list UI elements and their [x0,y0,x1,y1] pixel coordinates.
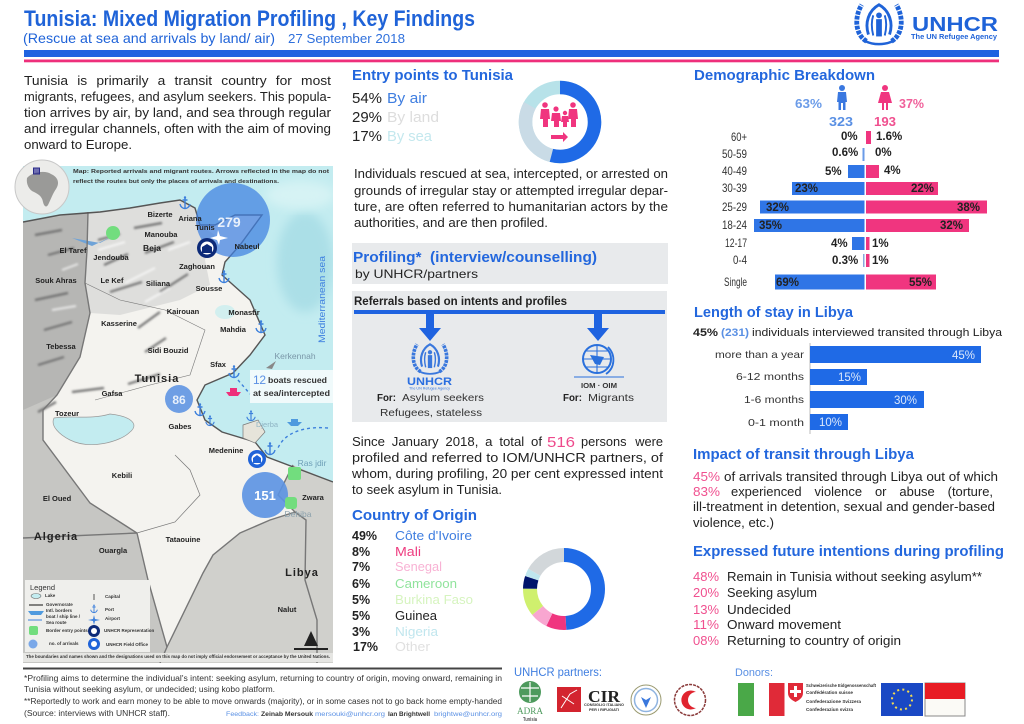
map place labels: Gafsa [102,389,123,398]
map place labels: Tebessa [46,342,77,351]
text: total profiled: whom, during profiling, 20 per cent expressed intent [351,467,664,481]
icon: female [878,85,892,110]
text: total profiled: 516 [547,434,575,451]
panel: referrals [352,291,667,422]
locator globe [15,160,69,214]
logo: CIR [557,687,624,712]
legend: Lake [45,593,56,598]
intentions list: 48% [693,569,719,584]
map place labels: Algeria [34,531,78,543]
footnotes: *Profiling aims to determine the individual's intent: seeking asylum, returning to country of origin, moving onward, remaining in [24,674,502,683]
legend: Governorate [46,602,73,607]
age labels: 60+ [731,130,747,144]
gender totals [795,96,924,129]
bar values: 1% [872,238,889,250]
map place labels: Ras jdir [298,458,327,468]
icon: UNHCR logo [857,5,999,44]
map place labels: Tataouine [166,535,200,544]
logo: UNHCR: The UN Refugee Agency [409,386,450,390]
legend: Capital [105,594,120,599]
map place labels: Le Kef [101,276,124,285]
arrow: to UNHCR [419,314,441,341]
text: total profiled: to seek asylum in Tunisia. [352,483,502,497]
text: UNHCR referral: For: [377,392,396,404]
heading: entry points: Entry points to Tunisia [352,67,514,84]
text: total profiled: Since January 2018, a total of [352,435,543,449]
text: UNHCR referral: Asylum seekers [402,392,484,404]
map disclaimer: The boundaries and names shown and the designations used on this map do not imply official endorsement or acceptance by the United Nations. [26,654,330,659]
partners [514,665,706,723]
male bars [754,148,864,290]
feedback contacts: Zeinab Mersouk [261,711,313,718]
entry point values [352,90,439,145]
legend: boat / ship line / [46,614,81,619]
footnotes: **Reportedly to work and earn money to be able to move onwards (majority), or in some cases not to go back home empty-handed [24,697,502,706]
intro text [24,73,332,152]
legend [25,580,155,652]
UNHCR representation office [197,238,217,258]
bar chart: stay duration: 45% [952,350,975,362]
summary line: individuals interviewed transited through Libya [752,327,1003,339]
entry point values: 29% [352,109,382,126]
intentions list: Onward movement [727,617,841,632]
bar chart: stay duration: 6-12 months [736,371,804,383]
bubble values: 151 [254,488,276,503]
intro text: and irregular channels, often with the aim of moving [24,121,331,136]
bar values: 32% [766,202,789,214]
bar values: 0.3% [832,255,858,267]
country list: 8% [352,545,370,559]
intentions list: Remain in Tunisia without seeking asylum** [727,569,982,584]
text: rescued at sea: authorities, and are then profiled. [354,216,548,230]
bar values [759,131,980,289]
map place labels: Dehiba [285,509,312,519]
legend: UNHCR Field Office [106,642,149,647]
country list: Other [395,639,431,654]
map place labels: Sousse [196,284,222,293]
text: IOM referral: For: [563,392,582,404]
map place labels [34,210,327,614]
legend: no. of arrivals [49,641,79,646]
map note: reflect the routes but only the places of arrivals and destinations. [73,179,280,185]
country list: 5% [352,609,370,623]
country list: Cameroon [395,576,457,591]
donut chart: entry points [525,87,595,156]
text: IOM referral: Migrants [588,392,634,404]
flag: Switzerland: Confederazione Svizzera [806,699,861,705]
logo: Red Crescent [674,684,706,716]
bar chart: stay duration: 15% [838,372,861,384]
map place labels: Libya [285,567,319,579]
bar values: 1.6% [876,131,902,143]
map place labels: Nalut [278,605,297,614]
title: 27 September 2018 [288,31,405,46]
gender totals: 193 [874,114,896,129]
bar values: 1% [872,255,889,267]
intentions list [693,569,982,648]
country list: Nigeria [395,624,439,639]
text: UNHCR referral [377,392,484,419]
panel: country of origin [352,507,598,654]
map place labels: Siliana [146,279,171,288]
logo: CIR: CIR [588,687,621,706]
impact text: 83% [693,485,720,499]
panel: demographic breakdown: Demographic Breakdown [694,67,875,84]
logo: IOM [574,345,624,390]
map place labels: Zaghouan [179,262,215,271]
map place labels: Jendouba [93,253,130,262]
entry point values: 54% [352,90,382,107]
panel: entry points [352,67,595,156]
entry point values: By air [387,90,427,107]
country list [352,528,473,654]
icon: UNHCR logo: The UN Refugee Agency [911,34,997,41]
age labels: 30-39 [722,181,747,195]
logo: ADRA [517,681,543,723]
panel: impact of transit: Impact of transit through Libya [693,446,915,463]
map disclaimer [23,653,333,662]
flag: Switzerland [788,683,876,713]
age labels: 12-17 [725,236,747,250]
map place labels: Zwara [302,493,325,502]
north arrow [294,631,328,650]
map place labels: Djerba [256,420,279,429]
callout: boats rescued [250,370,333,403]
footnotes [23,668,502,718]
country list: 5% [352,593,370,607]
intentions list: 20% [693,585,719,600]
text: rescued at sea [354,167,668,230]
gender totals: 323 [829,114,853,129]
age labels: 0-4 [733,253,747,267]
map place labels: Beja [143,243,161,253]
country list: Côte d'Ivoire [395,528,472,543]
bar values: 55% [909,277,932,289]
panel: country of origin: Country of Origin [352,507,477,524]
bar chart: stay duration: more than a year [715,349,805,361]
bar values: 0.6% [832,147,858,159]
flag: Italy [738,683,784,716]
map place labels: Kasserine [101,319,137,328]
logo: UNHCR [407,344,452,390]
map place labels: Mahdia [220,325,247,334]
age labels [722,130,747,289]
map place labels: Manouba [145,230,178,239]
female bars [866,131,987,290]
bar values: 22% [911,183,934,195]
panel: length of stay in Libya: Length of stay in Libya [694,304,854,321]
intro text: onward to Europe. [24,137,132,152]
flag: Switzerland: Confédération suisse [806,690,853,696]
logo: UNHCR: UNHCR [407,376,452,388]
legend: Port [105,607,115,612]
legend: Intl. borders [46,608,72,613]
panel: future intentions: Expressed future intentions during profiling [693,543,1004,560]
icon: UNHCR logo: UNHCR [912,14,999,36]
logo: IOM: IOM · OIM [581,383,617,390]
feedback contacts: brightwe@unhcr.org [434,711,502,718]
green border points [106,226,301,509]
country list: Senegal [395,559,442,574]
text: rescued at sea: ture, are often referred to humanitarian actors by the [354,200,668,214]
bar chart: stay duration: 30% [894,395,917,407]
entry point values: By land [387,109,439,126]
logo: circular partner [631,685,661,715]
map place labels: Nabeul [234,242,260,251]
feedback contacts: Feedback: [226,711,259,718]
map place labels: El Oued [43,494,72,503]
impact text [693,470,998,530]
age labels: 40-49 [722,164,747,178]
summary line: 45% [693,327,718,339]
panel: profiling: by UNHCR/partners [355,267,478,281]
impact text: ill-treatment in detention, sexual and gender-based [693,500,995,514]
bar values: 23% [795,183,818,195]
panel: demographic breakdown [694,67,987,290]
port anchors [180,196,275,455]
country list: Mali [395,544,421,559]
country list: Guinea [395,608,438,623]
bar values: 5% [825,166,842,178]
footnotes: (Source: interviews with UNHCR staff). [24,709,170,718]
map place labels: El Taref [60,246,87,255]
panel: length of stay in Libya [693,304,1003,434]
panel: profiling [352,243,668,284]
feedback contacts [226,711,502,718]
map place labels: Gabes [169,422,191,431]
age labels: 25-29 [722,200,747,214]
feedback contacts: mersouki@unhcr.org [315,711,385,718]
text: total profiled: profiled and referred to IOM/UNHCR partners, of [352,451,664,465]
impact text: 45% [693,470,720,484]
callout: boats rescued: 12 [253,373,266,387]
map place labels: Ariana [178,214,202,223]
title: (Rescue at sea and arrivals by land/ air) [23,30,275,46]
bar values: 38% [957,202,980,214]
sea routes [238,380,328,448]
island: Djerba [243,420,265,443]
header rule [24,50,999,62]
map place labels: Tunisia [135,373,179,385]
logo: CIR: CONSIGLIO ITALIANO [584,703,624,707]
bubble values: 86 [172,393,186,407]
bar values: 69% [776,277,799,289]
map place labels: Tunis [195,223,215,232]
age labels: 18-24 [722,218,747,232]
map: Tunisia arrivals and routes [15,160,335,663]
map place labels: Monastir [228,308,260,317]
island: Kerkennah [266,361,276,369]
map place labels: Sfax [210,360,227,369]
intentions list: 13% [693,602,719,617]
bubble: 279 arrivals [196,183,270,257]
text: total profiled: persons were [581,435,663,449]
donors [735,667,965,716]
map place labels: Kebili [112,471,132,480]
map place labels: Souk Ahras [35,276,77,285]
donut chart: country of origin [530,555,598,623]
arrow: to IOM [587,314,609,341]
map place labels: Medenine [209,446,243,455]
text: total profiled [351,434,664,497]
bubble values: 279 [217,214,241,230]
legend: Airport [105,616,120,621]
flag: red and white [925,683,965,716]
gender totals: 37% [899,96,924,111]
UNHCR field office [248,450,266,468]
intro text: Tunisia is primarily a transit country for most [24,73,331,88]
age labels: Single [724,275,747,289]
map place labels: Bizerte [147,210,173,219]
boat icons [226,388,302,426]
intro text: migrants, refugees, and asylum seekers. This popula- [24,89,331,104]
title: Tunisia: Mixed Migration Profiling , Key Findings [24,6,475,31]
impact text: experienced violence or abuse (torture, [731,485,993,499]
entry point values: By sea [387,128,433,145]
map note: Map: Reported arrivals and migrant routes. Arrows reflected in the map do not [73,169,329,175]
intro text: tion arrives by air, by land, and sea through regular [24,105,332,120]
map note [73,169,329,185]
text: rescued at sea: Individuals rescued at sea, intercepted, or arrested on [354,167,668,181]
summary line: (231) [721,327,749,339]
logo: ADRA: ADRA [517,707,543,717]
title [23,6,475,46]
flag: Switzerland: Schweizerische Eidgenossenschaft [806,683,876,689]
legend: UNHCR Representation [104,628,155,633]
impact text: violence, etc.) [693,516,774,530]
map place labels: Kairouan [167,307,200,316]
legend: Border entry points [46,628,88,633]
intentions list: Returning to country of origin [727,633,901,648]
logo: ADRA: Tunisia [523,717,538,723]
country list: Burkina Faso [395,592,473,607]
flag: European Union [881,683,923,716]
map place labels: Kerkennah [274,351,316,361]
callout: boats rescued: at sea/intercepted [253,389,330,398]
bar chart: stay duration: 0-1 month [748,417,804,429]
flag: Switzerland: Confederaziun svizra [806,707,853,713]
panel: profiling: Profiling* (interview/counselling) [353,249,597,266]
logo: CIR: PER I RIFUGIATI [589,708,619,712]
bar chart: stay duration: 1-6 months [744,394,804,406]
intentions list: Seeking asylum [727,585,817,600]
intentions list: 11% [693,617,719,632]
heading: referrals: Referrals based on intents and profiles [354,294,567,308]
intentions list: Undecided [727,602,791,617]
bar chart: stay duration: 10% [819,417,842,429]
panel: future intentions [693,543,1004,648]
donors: Donors: [735,667,773,679]
icon: family with arrow [540,102,578,142]
partners: UNHCR partners: [514,665,602,679]
gender totals: 63% [795,96,822,111]
bar values: 32% [940,220,963,232]
callout: boats rescued: boats rescued [268,376,327,385]
country list: 49% [352,529,377,543]
bar chart: stay duration [715,343,981,434]
map place labels: Tozeur [55,409,79,418]
text: UNHCR referral: Refugees, stateless [380,407,482,419]
intentions list: 08% [693,633,719,648]
bubble: 151 arrivals [242,472,288,518]
country list: 6% [352,577,370,591]
country list: 3% [352,625,370,639]
bar values: 4% [884,165,901,177]
panel: impact of transit [693,446,998,530]
bar values: 0% [875,147,892,159]
legend: Legend [30,583,55,592]
country list: 7% [352,560,370,574]
bar values: 35% [759,220,782,232]
map place labels: Sidi Bouzid [148,346,189,355]
bubble: 86 arrivals [165,385,193,413]
bar values: 4% [831,238,848,250]
entry point values: 17% [352,128,382,145]
bar values: 0% [841,131,858,143]
bubble values [172,214,276,503]
icon: male [837,85,847,110]
age labels: 50-59 [722,147,747,161]
text: IOM referral [563,392,634,404]
legend: Sea route [46,620,67,625]
map place labels: Ouargla [99,546,128,555]
airport [210,230,228,245]
map place labels: Mediterranean sea [317,256,327,343]
text: rescued at sea: grounds of irregular stay or attempted irregular depar- [354,184,668,198]
rule: referrals [354,310,665,314]
feedback contacts: Ian Brightwell [388,711,430,718]
footnotes: Tunisia without seeking asylum, or undecided; using kobo platform. [24,685,275,694]
country list: 17% [353,640,378,654]
impact text: of arrivals transited through Libya out of which [724,470,998,484]
